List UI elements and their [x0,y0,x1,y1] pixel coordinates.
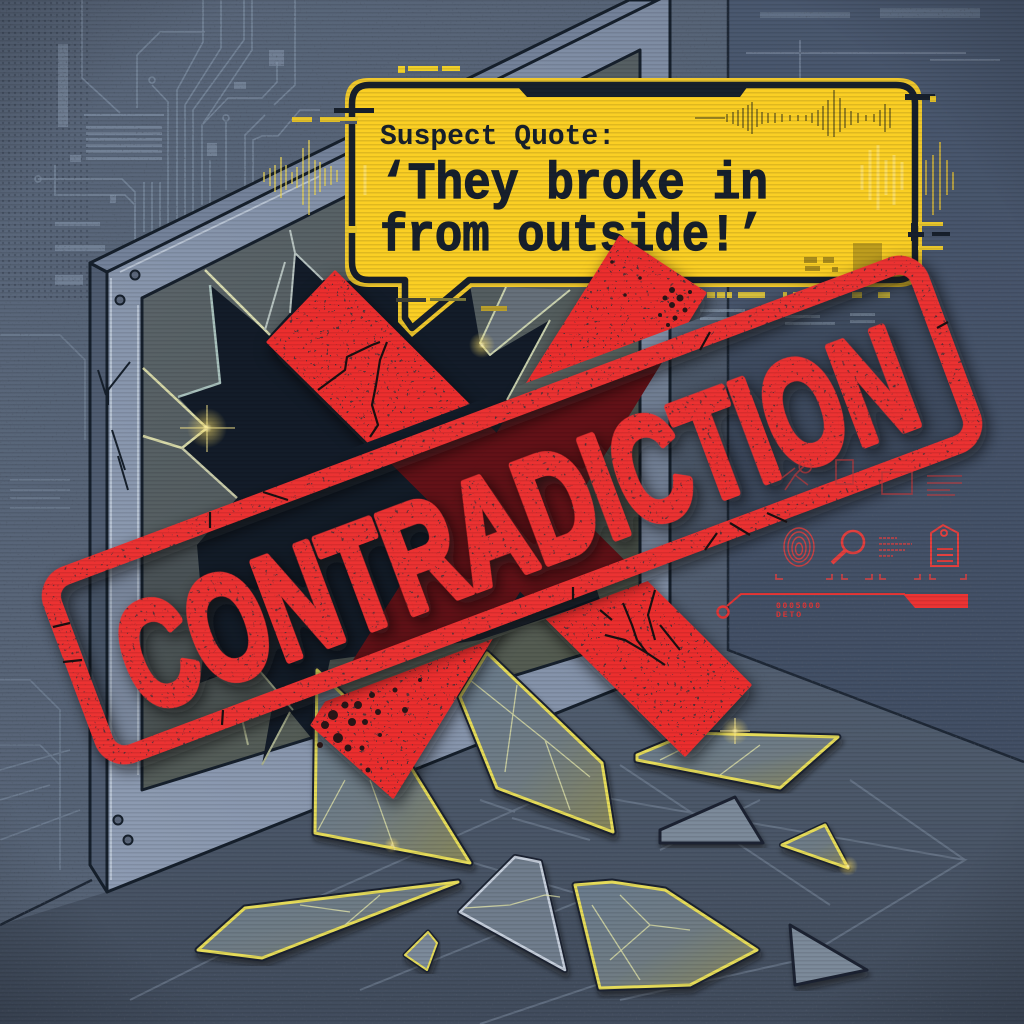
right wall [728,0,1024,800]
right waveform [926,142,953,215]
frame top depth [90,0,670,272]
speech bubble [292,66,953,337]
icon: fingerprint [784,528,814,566]
shard: centre gray [460,857,565,970]
icon: report lines [879,538,912,556]
icon: magnifier [832,531,864,563]
bubble scanlines [356,92,912,278]
bubble lower right blocks [804,243,882,273]
readout text: 0005000 [776,602,820,611]
shard: right gray [790,925,867,985]
sparkle: tall shard [384,837,400,853]
data panel: upper right [746,8,1000,120]
quote line one: ‘They broke in [380,155,768,214]
bubble top notch [517,86,748,97]
icon: evidence tag [931,525,958,566]
window glass [142,50,640,790]
shattered hole [178,253,600,765]
X cracks [318,342,680,665]
frame scratches [98,362,130,490]
floor glass shards [198,653,867,988]
broken window frame [90,0,670,892]
quote line two: from outside!’ [380,207,764,266]
shard: flat right [637,733,838,788]
shard: tiny [405,932,437,970]
shard: tall centre [460,653,613,832]
readout line [727,594,905,606]
X band: right-top to left-bottom [312,237,705,797]
shard: large yellow [575,882,757,988]
evidence icons: lower row [776,525,966,579]
sparkle: window crack [180,405,235,452]
left wall [0,0,730,1024]
bubble gaps and glitch marks [292,66,950,250]
readout bar [903,594,968,608]
stamp border [45,259,979,761]
quote label: Suspect Quote: [380,120,615,153]
yellow waveform behind bubble [264,140,337,215]
readout node [718,606,728,618]
sparkles [180,332,858,876]
wall halftone [0,0,90,300]
circuit traces: upper left [35,0,320,240]
bubble glow bars [365,145,902,210]
X blotches: lower left [317,678,422,772]
audio waveform [695,90,890,137]
frame front bars [107,0,670,892]
shard: tall left [315,670,470,863]
shard crack lines [300,680,760,980]
crack highlights [143,230,570,765]
corner brackets [776,574,966,579]
shard: small gray [660,797,763,843]
sparkle: floor right [720,717,750,745]
stamp [38,250,996,780]
right wall readout text [700,309,875,325]
tail glitch [396,298,507,311]
floor blueprint lines [130,765,965,1024]
bubble outer rim [345,78,922,337]
bubble body [352,85,915,328]
X band: left-top to right-bottom [268,272,750,755]
X blotches: upper right [610,260,692,327]
stamp cracks [53,322,948,725]
red data readout: DETO [776,611,801,620]
shard: long yellow [198,882,458,958]
circuit traces: mid and lower left [0,335,85,870]
shard: small yellow [782,825,848,868]
frame side depth [90,263,107,892]
under-bubble yellow dashes [707,292,890,298]
sparkle: upper crack [469,332,495,358]
red data readout [718,594,968,620]
floor [0,650,1024,1024]
sparkle: small shard [838,856,858,876]
stamp interior tint [68,274,963,746]
data blocks: upper left [55,44,284,285]
upper glass shard [480,287,570,355]
frame highlights [111,176,320,880]
red X [268,237,750,797]
frame rivets [114,270,140,844]
evidence icons: upper row [782,460,962,495]
